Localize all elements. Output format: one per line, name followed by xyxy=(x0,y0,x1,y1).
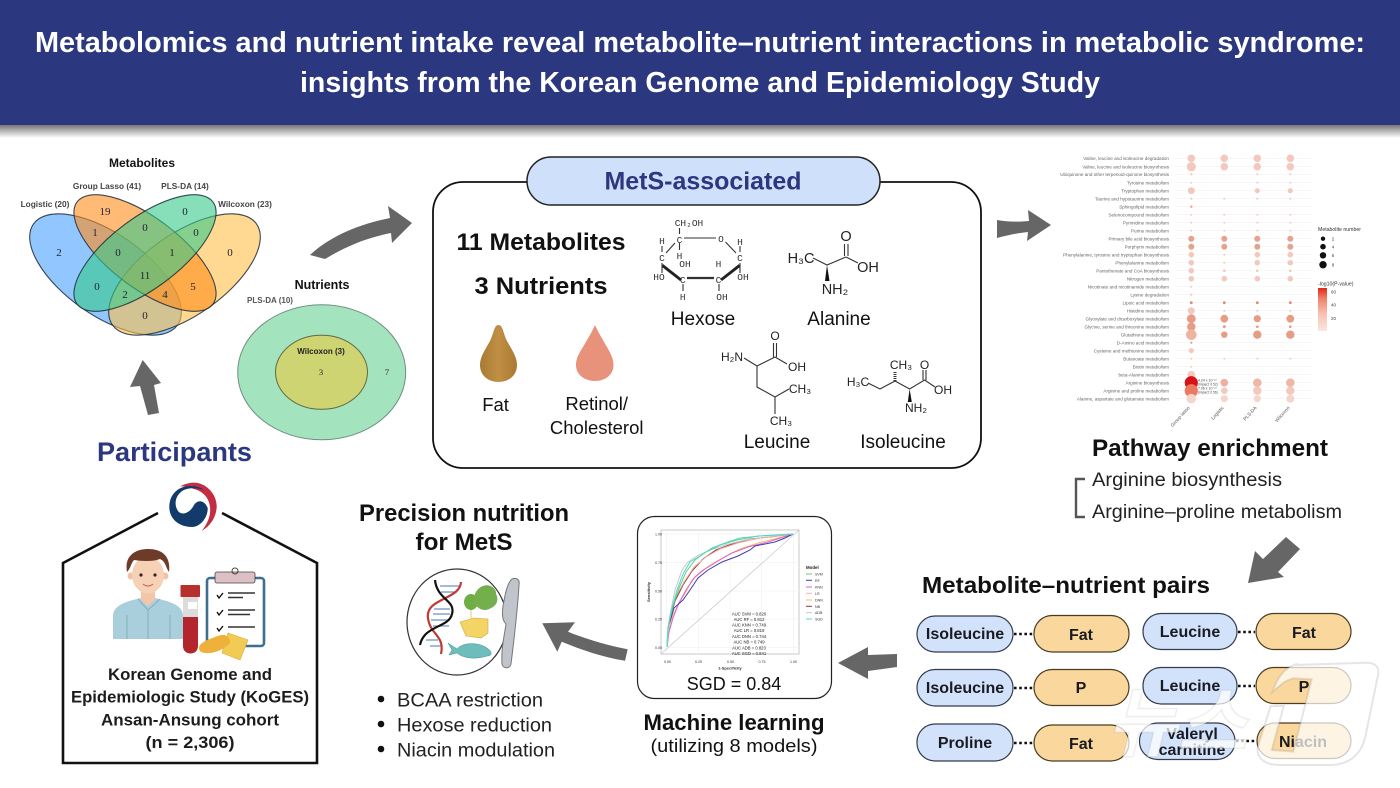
text: utilizing 8 models: (utilizing 8 models) xyxy=(650,736,818,756)
legend: ROC models: RF xyxy=(815,579,821,583)
structure: alanine: NH₂ xyxy=(822,282,848,298)
chart: pathway enrichment dot plot: Glutathione metabolism xyxy=(1121,332,1169,337)
chart: pathway enrichment dot plot: Selenocompound metabolism xyxy=(1108,212,1169,217)
chart: pathway enrichment dot plot: Biotin metabolism xyxy=(1133,364,1169,369)
legend: ROC models: KNN xyxy=(815,586,823,590)
DNA helix xyxy=(420,580,461,654)
chart: pathway enrichment dot plot: Butanoate metabolism xyxy=(1123,356,1169,361)
panel: metabolite-nutrient pairs xyxy=(917,614,1351,761)
panel: machine learning ROC chart: AUC ADB = 0.823 xyxy=(732,646,766,650)
chart: pathway enrichment dot plot: Porphyrin metabolism xyxy=(1125,244,1169,249)
text: cohort description: (n = 2,306) xyxy=(146,733,234,752)
watermark: news agency mark xyxy=(1101,662,1378,773)
panel: MetS-associated xyxy=(433,157,981,468)
panel: machine learning ROC chart: AUC KNN = 0.749 xyxy=(732,622,767,628)
list: dietary recommendations: Niacin modulation xyxy=(397,740,555,762)
legend: -log10 p-value colour bar: -log10(P-value) xyxy=(1318,282,1354,288)
pair: leucine-fat: Leucine xyxy=(1160,624,1220,641)
panel: nutrients Venn diagram xyxy=(238,278,406,440)
panel: metabolites Venn diagram: 4 xyxy=(162,289,168,301)
chart: pathway enrichment dot plot: Valine, leucine and isoleucine degradation xyxy=(1083,156,1169,161)
chart: pathway enrichment dot plot: Group lasso xyxy=(1170,405,1192,429)
chart: pathway enrichment dot plot: PLS-DA xyxy=(1242,405,1259,422)
chart: pathway enrichment dot plot: Nicotinate and nicotinamide metabolism xyxy=(1088,284,1169,289)
panel: metabolites Venn diagram: 19 xyxy=(100,206,111,218)
structure: hexose: C xyxy=(680,275,686,286)
panel: machine learning ROC chart: 0.75 xyxy=(758,660,766,664)
panel: machine learning ROC chart: 1-Specificity xyxy=(718,666,743,670)
panel: machine learning ROC chart: AUC DNN = 0.744 xyxy=(732,634,767,639)
legend: ROC models: DNN xyxy=(815,598,823,602)
legend: -log10 p-value colour bar xyxy=(1318,282,1354,331)
structure: hexose: C xyxy=(659,253,665,264)
pair: isoleucine-P xyxy=(917,670,1129,706)
icon: plate with DNA and food xyxy=(407,569,519,675)
chart: pathway enrichment dot plot: Phenylalanine, tyrosine and tryptophan biosynthesis xyxy=(1063,252,1170,257)
structure: hexose: OH xyxy=(737,272,749,283)
panel: metabolites Venn diagram: Metabolites xyxy=(109,156,175,170)
arrow: participants up to Venn xyxy=(130,360,161,415)
structure: isoleucine: OH xyxy=(934,383,952,397)
chart: pathway enrichment dot plot: Cysteine and methionine metabolism xyxy=(1094,348,1169,353)
chart: pathway enrichment dot plot: Purine metabolism xyxy=(1131,228,1169,233)
legend: ROC models: Model xyxy=(806,565,819,570)
structure: hexose: O xyxy=(718,234,724,245)
text: cohort description: Epidemiologic Study (KoGES) xyxy=(71,688,309,706)
panel: metabolites Venn diagram: 1 xyxy=(169,247,175,259)
icon: fat drop xyxy=(480,325,517,415)
pair: valerylcarnitine-niacin xyxy=(1140,723,1351,760)
chart: pathway enrichment dot plot: Ubiquinone and other terpenoid-quinone biosynthesis xyxy=(1060,172,1170,177)
icon: blood tube xyxy=(180,585,200,654)
icon: retinol/cholesterol drop: Cholesterol xyxy=(550,417,643,438)
legend: metabolite number: Metabolite number xyxy=(1318,227,1361,233)
panel: machine learning ROC chart: 1.00 xyxy=(655,532,662,536)
structure: hexose: H xyxy=(680,292,686,303)
structure: isoleucine: H₃C xyxy=(847,375,869,389)
structure: alanine xyxy=(788,229,879,330)
icon: clipboard xyxy=(207,568,264,646)
chart: pathway enrichment dot plot: D-Amino acid metabolism xyxy=(1117,340,1169,345)
structure: hexose: OH xyxy=(679,259,691,270)
structure: isoleucine: CH₃ xyxy=(890,358,912,372)
structure: isoleucine: O xyxy=(920,358,929,372)
panel: metabolites Venn diagram: 0 xyxy=(193,227,199,239)
heading pill: MetS-associated: MetS-associated xyxy=(604,168,802,196)
pair: leucine-fat xyxy=(1143,614,1351,650)
pair: leucine-fat: Fat xyxy=(1292,625,1317,642)
structure: leucine: H₂N xyxy=(721,350,743,364)
icon: retinol/cholesterol drop: Retinol/ xyxy=(565,393,629,414)
panel: metabolites Venn diagram: Logistic (20) xyxy=(21,199,70,209)
panel: machine learning ROC chart xyxy=(638,516,832,698)
structure: hexose: H xyxy=(677,251,682,262)
text: arginine-proline metabolism: Arginine–proline metabolism xyxy=(1092,502,1342,523)
panel: machine learning ROC chart: 0.50 xyxy=(727,660,734,664)
title banner: insights from the Korean Genome and Epidemiology Study xyxy=(300,67,1100,99)
legend: ROC models: NB xyxy=(815,605,821,609)
title: Metabolomics and nutrient intake reveal metabolite–nutrient interactions in metabolic syndrome: xyxy=(35,27,1365,59)
chart: pathway enrichment dot plot: beta-Alanine metabolism xyxy=(1118,372,1169,377)
structure: hexose: CH₂OH xyxy=(675,218,703,229)
structure: hexose xyxy=(653,218,749,330)
pair: proline-fat: Proline xyxy=(938,735,992,752)
chart: pathway enrichment dot plot: 7.06 x 10⁻¹⁰ xyxy=(1198,386,1217,390)
chart: pathway enrichment dot plot: Logistic xyxy=(1210,405,1226,421)
icon: knife xyxy=(502,578,519,668)
panel: metabolites Venn diagram xyxy=(10,156,280,359)
pair: isoleucine-fat xyxy=(917,616,1129,652)
chart: pathway enrichment dot plot: Taurine and hypotaurine metabolism xyxy=(1095,196,1169,201)
legend: ROC models: SVM xyxy=(815,572,823,576)
pair: valerylcarnitine-niacin: carnitine xyxy=(1159,742,1225,759)
chart: pathway enrichment dot plot: Pantothenate and CoA biosynthesis xyxy=(1096,268,1170,273)
chart: pathway enrichment dot plot: Tryptophan metabolism xyxy=(1121,188,1169,193)
list: dietary recommendations: BCAA restriction xyxy=(397,690,543,712)
structure: leucine: Leucine xyxy=(744,432,810,453)
structure: hexose: HO xyxy=(653,272,665,283)
heading: precision nutrition for MetS xyxy=(359,500,569,556)
structure: hexose: OH xyxy=(716,292,728,303)
icon: broccoli xyxy=(464,585,497,622)
panel: metabolites Venn diagram: 2 xyxy=(56,247,62,259)
panel: metabolites Venn diagram: 0 xyxy=(227,247,233,259)
pair: isoleucine-fat: Fat xyxy=(1069,627,1094,644)
list: dietary recommendations: Hexose reduction xyxy=(397,716,552,736)
structure: isoleucine: Isoleucine xyxy=(860,432,946,453)
arrow: machine learning to precision nutrition xyxy=(542,622,628,661)
pair: leucine-P: Leucine xyxy=(1160,678,1220,695)
legend: metabolite number: 4 xyxy=(1332,244,1335,250)
pair: leucine-P xyxy=(1143,668,1351,704)
panel: machine learning ROC chart: 0.25 xyxy=(655,618,662,622)
structure: hexose: H xyxy=(716,259,721,270)
chart: pathway enrichment dot plot: Histidine metabolism xyxy=(1127,308,1169,313)
pair: valerylcarnitine-niacin: Valeryl xyxy=(1166,726,1218,743)
panel: metabolites Venn diagram: 11 xyxy=(140,270,150,282)
panel: nutrients Venn diagram: 3 xyxy=(319,367,323,377)
icon: fish xyxy=(448,643,491,658)
structure: hexose: H xyxy=(659,236,665,247)
arrow: pathway to pairs xyxy=(1248,537,1300,583)
structure: alanine: H₃C xyxy=(788,251,814,267)
panel: metabolites Venn diagram: 0 xyxy=(142,310,148,322)
structure: leucine: O xyxy=(770,329,780,343)
panel: machine learning ROC chart: AUC NB = 0.749 xyxy=(733,640,765,644)
legend: -log10 p-value colour bar: 60 xyxy=(1331,290,1337,294)
legend: ROC models: SGD xyxy=(815,618,823,622)
chart: pathway enrichment dot plot: Glycine, serine and threonine metabolism xyxy=(1084,324,1169,329)
list: dietary recommendations xyxy=(378,690,555,762)
arrow: nutrients to MetS-associated xyxy=(310,206,412,259)
panel: metabolites Venn diagram: 1 xyxy=(92,227,98,239)
structure: alanine: O xyxy=(840,229,852,245)
icon: bread xyxy=(199,633,248,660)
chart: pathway enrichment dot plot: Alanine, aspartate and glutamate metabolism xyxy=(1077,396,1169,401)
panel: machine learning ROC chart: SGD = 0.84 xyxy=(687,674,781,694)
panel: metabolites Venn diagram: 2 xyxy=(122,289,128,301)
structure: alanine: Alanine xyxy=(807,309,871,330)
panel: metabolites Venn diagram: Group Lasso (41) xyxy=(73,181,141,191)
pair: isoleucine-P: P xyxy=(1076,680,1087,697)
icon: government emblem xyxy=(169,483,217,531)
pair: valerylcarnitine-niacin: Niacin xyxy=(1279,734,1327,751)
heading: participants: Participants xyxy=(97,437,252,467)
legend: metabolite number: 2 xyxy=(1332,236,1335,242)
text: arginine biosynthesis: Arginine biosynthesis xyxy=(1092,470,1282,491)
chart: pathway enrichment dot plot: (Impact: 0.52) xyxy=(1198,382,1218,386)
structure: hexose: C xyxy=(677,235,683,246)
structure: hexose: C xyxy=(716,275,722,286)
panel: metabolites Venn diagram: 0 xyxy=(115,247,121,259)
text: 11 Metabolites: 11 Metabolites xyxy=(456,229,626,256)
text: 3 Nutrients: 3 Nutrients xyxy=(474,273,608,300)
structure: hexose: Hexose xyxy=(671,309,735,330)
panel: nutrients Venn diagram: Wilcoxon (3) xyxy=(297,347,345,356)
icon: participant xyxy=(113,549,183,639)
legend: metabolite number: 6 xyxy=(1332,253,1335,258)
legend: metabolite number xyxy=(1318,227,1361,268)
heading: pathway enrichment: Pathway enrichment xyxy=(1092,435,1328,462)
text: cohort description: Ansan-Ansung cohort xyxy=(101,710,279,730)
panel: machine learning ROC chart: 0.00 xyxy=(664,660,671,664)
panel: machine learning ROC chart: AUC RF = 0.812 xyxy=(734,617,765,622)
structure: isoleucine: NH₂ xyxy=(905,401,927,415)
icon: retinol/cholesterol drop xyxy=(550,325,643,438)
structure: hexose: C xyxy=(737,253,743,264)
chart: pathway enrichment dot plot: Valine, leucine and isoleucine biosynthesis xyxy=(1082,164,1170,169)
chart: pathway enrichment dot plot: Phenylalanine metabolism xyxy=(1115,260,1169,265)
watermark: news agency mark: 뉴스 xyxy=(1101,662,1269,773)
pair: isoleucine-fat: Isoleucine xyxy=(926,626,1004,643)
legend: ROC models: LR xyxy=(815,592,820,596)
chart: pathway enrichment dot plot: Pyrimidine metabolism xyxy=(1123,220,1169,225)
text: cohort description: Korean Genome and xyxy=(108,665,272,684)
panel: machine learning ROC chart: 0.75 xyxy=(655,561,662,565)
panel: machine learning ROC chart: 1.00 xyxy=(790,660,797,664)
panel: machine learning ROC chart: 0.25 xyxy=(695,660,702,664)
panel: metabolites Venn diagram: 0 xyxy=(182,206,188,218)
arrow: MetS-associated to pathway enrichment xyxy=(997,210,1051,241)
structure: hexose: H xyxy=(737,237,743,248)
panel: machine learning ROC chart: AUC LR = 0.819 xyxy=(734,628,765,633)
pair: isoleucine-P: Isoleucine xyxy=(926,680,1004,697)
panel: machine learning ROC chart: AUC SGD = 0.841 xyxy=(732,651,767,656)
legend: ROC models: ADB xyxy=(815,611,823,615)
panel: metabolites Venn diagram: 0 xyxy=(94,281,100,293)
chart: pathway enrichment dot plot: Sphingolipid metabolism xyxy=(1119,204,1169,209)
structure: leucine: CH₃ xyxy=(789,382,811,396)
chart: pathway enrichment dot plot: 4.24 x 10⁻¹⁰ xyxy=(1198,378,1217,382)
legend: ROC models xyxy=(806,565,823,622)
structure: leucine: OH xyxy=(788,360,806,374)
structure: leucine: CH₃ xyxy=(770,414,792,428)
structure: isoleucine xyxy=(847,358,952,453)
structure: leucine xyxy=(721,329,811,453)
icon: fat drop: Fat xyxy=(482,394,509,415)
legend: metabolite number: 8 xyxy=(1332,262,1335,268)
structure: alanine: OH xyxy=(857,260,879,276)
chart: pathway enrichment dot plot: Lysine degradation xyxy=(1130,292,1169,297)
chart: pathway enrichment dot plot: Arginine and proline metabolism xyxy=(1103,388,1169,393)
panel: metabolites Venn diagram: Wilcoxon (23) xyxy=(218,199,272,209)
pair: proline-fat xyxy=(917,724,1129,761)
pair: leucine-P: P xyxy=(1299,679,1310,696)
chart: pathway enrichment dot plot: Glyoxylate and dicarboxylate metabolism xyxy=(1086,316,1169,321)
chart: pathway enrichment dot plot: Nitrogen metabolism xyxy=(1127,276,1169,281)
heading: machine learning: Machine learning xyxy=(644,710,824,735)
panel: machine learning ROC chart: 0.00 xyxy=(655,646,662,650)
panel: nutrients Venn diagram: PLS-DA (10) xyxy=(247,296,293,305)
panel: metabolites Venn diagram: 0 xyxy=(142,222,148,234)
chart: pathway enrichment dot plot xyxy=(1060,154,1361,429)
pair: proline-fat: Fat xyxy=(1069,736,1094,753)
chart: pathway enrichment dot plot: Arginine biosynthesis xyxy=(1126,380,1170,385)
panel: participants house xyxy=(63,483,317,763)
panel: machine learning ROC chart: Sensitivity xyxy=(646,581,651,602)
chart: pathway enrichment dot plot: Lipoic acid metabolism xyxy=(1123,300,1169,305)
panel: nutrients Venn diagram: 7 xyxy=(385,367,389,377)
chart: pathway enrichment dot plot: Tyrosine metabolism xyxy=(1127,180,1169,185)
heading: precision nutrition for MetS: for MetS xyxy=(416,529,512,556)
heading pill: MetS-associated xyxy=(527,157,880,205)
panel: machine learning ROC chart: 0.50 xyxy=(655,590,662,594)
text: cohort description xyxy=(71,665,309,752)
panel: nutrients Venn diagram: Nutrients xyxy=(295,278,349,292)
icon: cheese xyxy=(460,618,488,638)
legend: -log10 p-value colour bar: 40 xyxy=(1331,302,1337,308)
legend: -log10 p-value colour bar: 20 xyxy=(1331,316,1337,321)
bracket: pathway highlights xyxy=(1076,479,1085,517)
title banner xyxy=(0,0,1400,138)
heading: precision nutrition for MetS: Precision nutrition xyxy=(359,500,569,527)
chart: pathway enrichment dot plot: Wilcoxon xyxy=(1274,405,1292,424)
chart: pathway enrichment dot plot: (Impact: 0.56) xyxy=(1198,390,1218,394)
panel: machine learning ROC chart: AUC SVM = 0.820 xyxy=(732,612,767,616)
heading: metabolite-nutrient pairs: Metabolite–nutrient pairs xyxy=(922,572,1210,598)
panel: metabolites Venn diagram: PLS-DA (14) xyxy=(161,181,209,191)
arrow: pairs to machine learning xyxy=(838,647,897,679)
chart: pathway enrichment dot plot: Primary bile acid biosynthesis xyxy=(1108,236,1170,241)
panel: metabolites Venn diagram: 5 xyxy=(190,281,196,293)
